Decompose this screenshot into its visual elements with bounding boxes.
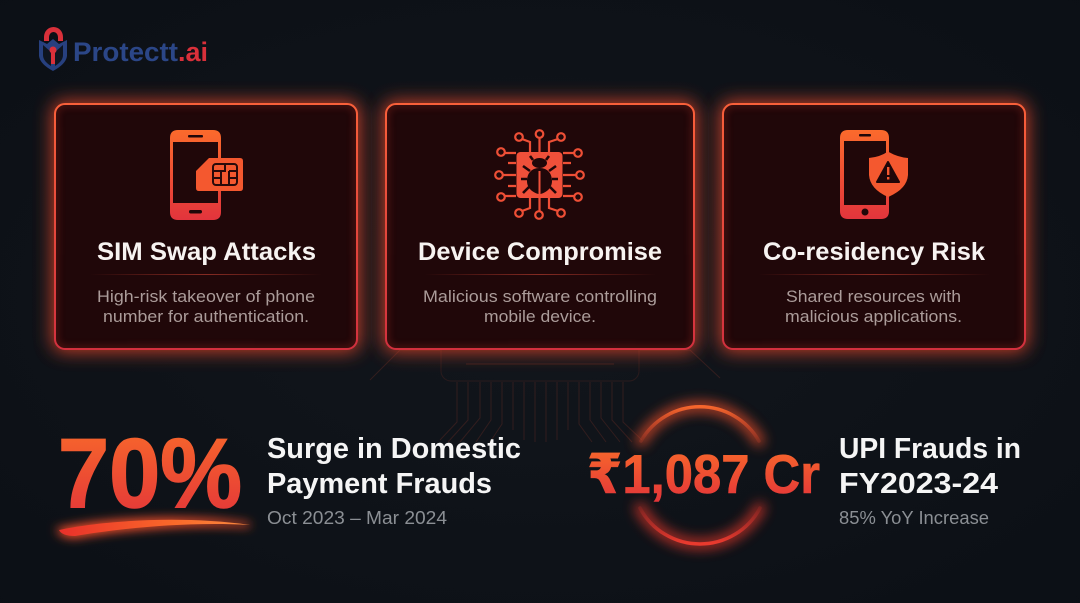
card description: [423, 287, 657, 326]
card description: Malicious software controlling: [423, 287, 657, 306]
card description: mobile device.: [484, 307, 596, 326]
stat period: Oct 2023 – Mar 2024: [267, 508, 447, 528]
card description: Shared resources with: [786, 287, 961, 306]
icon: phone with warning shield: [840, 130, 908, 219]
panel: Co-residency Risk: [720, 101, 1028, 352]
icon: phone with SIM card: [170, 130, 243, 220]
swoosh underline: [59, 520, 250, 536]
big number 70%: 70%: [58, 418, 242, 528]
stat label: Surge in Domestic: [267, 433, 521, 465]
logo: .ai: [178, 37, 208, 67]
card description: [97, 287, 315, 326]
card description: malicious applications.: [785, 307, 962, 326]
circuit board background: [370, 340, 720, 442]
card description: [785, 287, 962, 326]
card heading: Co-residency Risk: [763, 238, 985, 266]
stat label: [267, 433, 521, 500]
card description: number for authentication.: [103, 307, 309, 326]
stat label: UPI Frauds in: [839, 433, 1021, 465]
logo: [39, 27, 208, 71]
panel: SIM Swap Attacks: [52, 101, 360, 352]
logo wordmark: Protectt: [73, 37, 178, 67]
card heading: SIM Swap Attacks: [97, 238, 316, 266]
panel: Device Compromise: [383, 101, 697, 352]
big number amount: ₹1,087 Cr: [587, 443, 820, 505]
stat: UPI frauds: [587, 407, 1021, 544]
icon: bug on chip: [495, 130, 584, 219]
card description: High-risk takeover of phone: [97, 287, 315, 306]
stat: 70% surge: [58, 418, 521, 536]
stat label: FY2023-24: [839, 468, 998, 500]
icon: padlock shield: [39, 27, 67, 71]
stat growth: 85% YoY Increase: [839, 508, 989, 528]
glowing ring: [640, 407, 760, 544]
stat label: Payment Frauds: [267, 468, 492, 500]
card heading: Device Compromise: [418, 238, 662, 266]
stat label: [839, 433, 1021, 500]
